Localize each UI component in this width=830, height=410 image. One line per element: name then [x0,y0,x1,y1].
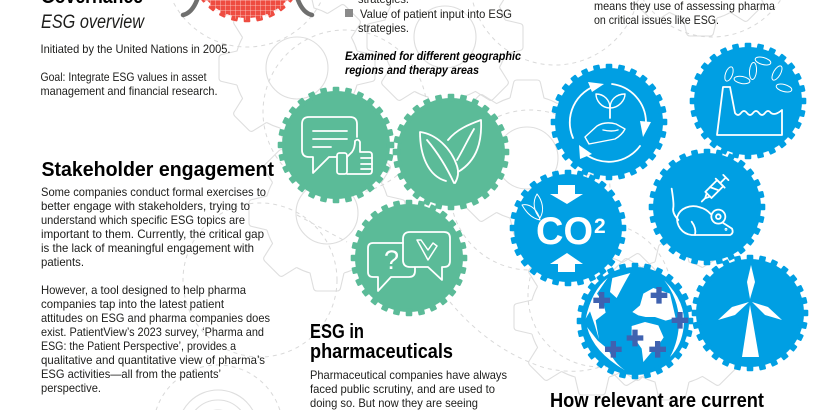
text block: stakeholder engagement: exist. PatientView’s 2023 survey, ‘Pharma and [41,325,264,339]
icon: green gear, leaves [385,85,521,221]
text block: bullet list [345,0,512,35]
text block: ESG in pharmaceuticals: faced public scrutiny, and are used to [310,382,495,396]
text block: ESG in pharmaceuticals [310,368,507,410]
background gear outlines [178,0,778,410]
text block: examined note: Examined for different geographic [345,49,521,63]
subheading: ESG overview: ESG overview [41,12,145,33]
text block: stakeholder engagement: companies tap into the latest patient [41,297,225,311]
text block: examined note: regions and therapy areas [345,63,479,77]
text block: bullet list: strategies. [358,21,409,35]
text block: assessing pharma [594,0,775,27]
text block: stakeholder engagement: understand which specific ESG topics are [41,213,245,227]
heading: ESG in pharmaceuticals [310,321,453,363]
heading: stakeholder engagement: Stakeholder engagement [42,159,274,181]
heading: ESG in pharmaceuticals: pharmaceuticals [310,341,453,363]
text block: stakeholder engagement: attitudes on ESG and pharma companies does [41,311,270,325]
text block: stakeholder engagement: However, a tool designed to help pharma [41,283,246,297]
text block: stakeholder engagement [41,185,270,395]
text block: ESG in pharmaceuticals: Pharmaceutical companies have always [310,368,507,382]
text block: stakeholder engagement: ESG: the Patient Perspective’, provides a [41,339,236,353]
text block: stakeholder engagement: better engage with stakeholders, trying to [41,199,250,213]
text block: assessing pharma: on critical issues like ESG. [594,13,719,27]
icon: blue gear, lab mouse and syringe [641,140,777,276]
text block: stakeholder engagement: important to them. Currently, the critical gap [41,227,264,241]
text block: ESG in pharmaceuticals: doing so. But now they are seeing [310,396,478,410]
text block: ESG overview: Goal: Integrate ESG values in asset [40,70,207,84]
icon: blue gear, globe with medical crosses [569,254,705,390]
text block: examined note [345,49,521,77]
icon: green gear, question and answer bubbles: ? [384,245,399,275]
heading: ESG in pharmaceuticals: ESG in [310,321,364,343]
text block: stakeholder engagement: patients. [41,255,84,269]
icon: red gear with grey arcs [181,0,317,33]
icon: blue gear, wind turbine [684,246,820,382]
text block: stakeholder engagement: Some companies conduct formal exercises to [41,185,266,199]
text block: ESG overview: management and financial research. [40,84,218,98]
text block: stakeholder engagement: is the lack of meaningful engagement with [41,241,254,255]
text block: ESG overview [40,42,230,98]
text block: stakeholder engagement: perspective. [41,381,101,395]
icon: blue gear, CO2 with arrows: CO [536,210,593,253]
text block: stakeholder engagement: qualitative and quantitative view of pharma’s [41,353,265,367]
text block: stakeholder engagement: ESG activities—all from the patients’ [41,367,221,381]
text block: ESG overview: Initiated by the United Nations in 2005. [40,42,230,56]
icon: green gear, question and answer bubbles [343,191,479,327]
icon: blue gear, recycling plant in hand [543,55,679,191]
icon: blue gear, CO2 with arrows: 2 [594,215,606,238]
icon: blue gear, CO2 with arrows [502,161,638,297]
text block: bullet list: Value of patient input into ESG [360,7,512,21]
icon: green gear, speech bubble and thumbs up [270,78,406,214]
icon: blue gear, factory with leaves [682,34,818,170]
background dashed circles [153,0,794,410]
